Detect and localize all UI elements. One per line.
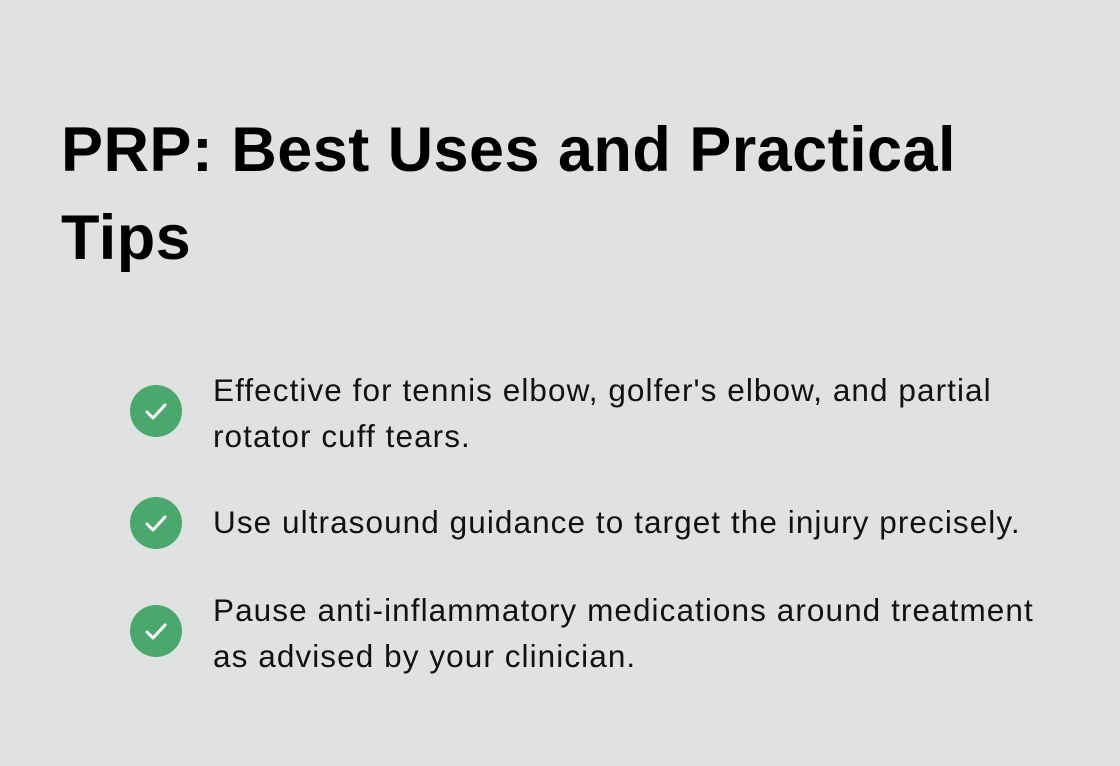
item: anti-inflammatory: [130, 592, 1034, 674]
text: Pause anti-inflammatory medications around treatment: [213, 592, 1034, 628]
text: rotator cuff tears.: [213, 418, 471, 454]
item: tennis elbow: [130, 372, 992, 454]
text: [213, 592, 1034, 674]
title: [61, 115, 956, 273]
item: ultrasound: [130, 497, 1021, 549]
icon: check: [130, 385, 182, 437]
title: Tips: [61, 203, 191, 273]
text: as advised by your clinician.: [213, 638, 636, 674]
text: [213, 372, 992, 454]
icon: check: [130, 605, 182, 657]
title: PRP: Best Uses and Practical: [61, 115, 956, 185]
icon: check: [130, 497, 182, 549]
text: Use ultrasound guidance to target the injury precisely.: [213, 504, 1021, 540]
text: Effective for tennis elbow, golfer's elbow, and partial: [213, 372, 992, 408]
